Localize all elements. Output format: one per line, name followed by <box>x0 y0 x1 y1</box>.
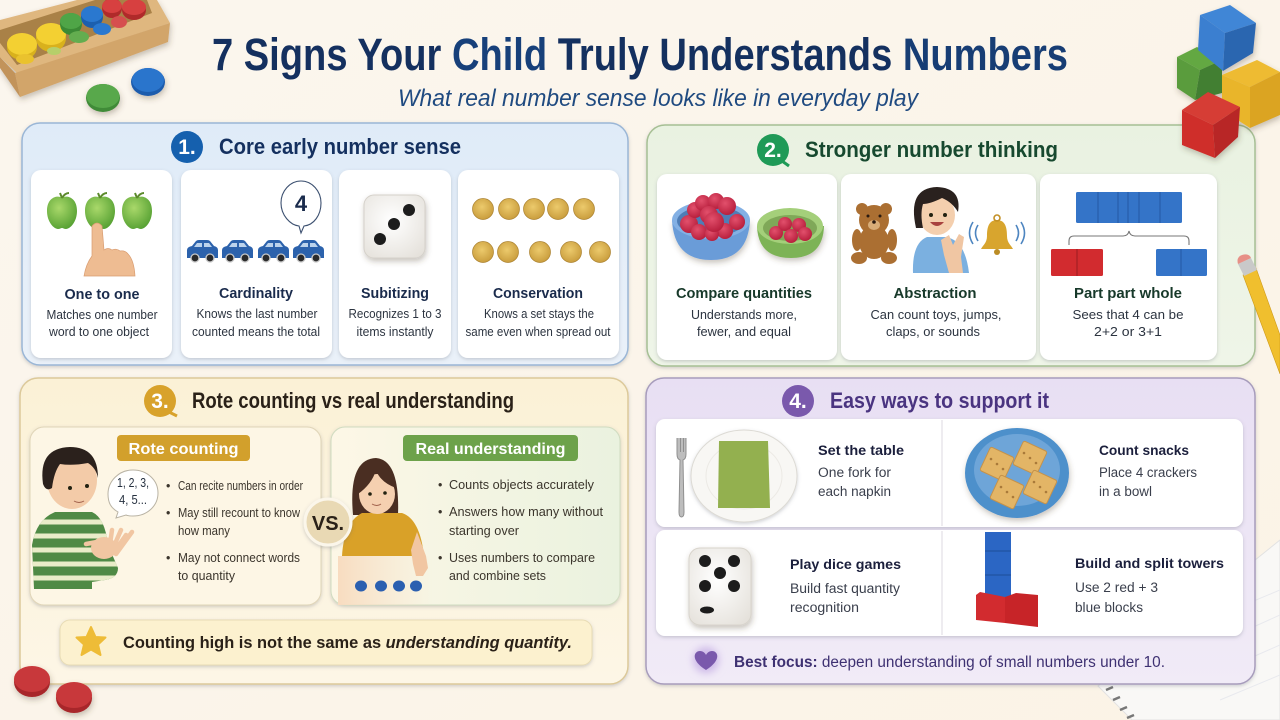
label: Cardinality <box>219 286 293 302</box>
icon: bell with sound waves <box>970 215 1024 255</box>
bullet list: rote counting: how many <box>178 524 231 538</box>
label: One to one <box>64 287 140 303</box>
description <box>870 307 1002 339</box>
bullet list: real understanding: Counts objects accurately <box>449 478 595 492</box>
activity description: blue blocks <box>1075 600 1143 615</box>
card: subitizing <box>339 170 451 358</box>
activity: build and split towers <box>976 532 1224 627</box>
title: 7 Signs Your Child Truly Understands Numbers <box>212 29 1068 80</box>
description: Knows a set stays the <box>484 306 594 321</box>
description <box>348 306 442 339</box>
description: counted means the total <box>192 324 320 339</box>
bullet list: real understanding: • <box>438 505 442 519</box>
wooden blocks stack <box>1177 5 1280 158</box>
pill: real understanding: Real understanding <box>416 441 566 458</box>
description: same even when spread out <box>466 324 611 339</box>
activity: set the table <box>677 430 904 522</box>
activity description: Build fast quantity <box>790 581 900 596</box>
label: Conservation <box>493 286 583 302</box>
description <box>46 307 158 339</box>
description: fewer, and equal <box>697 324 791 339</box>
activity description <box>1075 580 1158 615</box>
activity: play dice games <box>689 548 901 625</box>
pill: rote counting <box>117 435 250 461</box>
description: Knows the last number <box>196 306 318 321</box>
pill: real understanding <box>403 435 578 461</box>
bullet list: real understanding: starting over <box>449 524 519 538</box>
panel: rote counting vs real understanding <box>20 378 628 684</box>
card: one to one <box>31 170 172 358</box>
panel: stronger number thinking <box>647 125 1255 366</box>
bullet list: rote counting: May not connect words <box>178 551 300 565</box>
pencil <box>1238 254 1280 374</box>
description: 2+2 or 3+1 <box>1094 324 1162 339</box>
speech bubble: counting: 1, 2, 3, <box>117 476 149 490</box>
heading 3: Rote counting vs real understanding <box>192 388 514 413</box>
badge: vs: VS. <box>312 513 344 535</box>
red counter two <box>56 682 92 713</box>
activity label: Play dice games <box>790 556 901 572</box>
bullet list: rote counting: Can recite numbers in order <box>178 479 303 493</box>
bullet list: real understanding: Answers how many without <box>449 505 604 519</box>
illustration: boy counting on fingers <box>30 447 132 589</box>
bullet list: rote counting <box>166 479 303 583</box>
subtitle: What real number sense looks like in everyday play <box>398 85 920 112</box>
activity description <box>1099 465 1197 499</box>
badge: vs <box>305 499 351 545</box>
card: cardinality <box>181 170 332 358</box>
description: Understands more, <box>691 307 797 322</box>
callout text: Counting high is not the same as understanding quantity. <box>123 633 572 652</box>
description: Sees that 4 can be <box>1072 307 1184 322</box>
loose green counter <box>86 84 120 112</box>
heading 4: Easy ways to support it <box>830 388 1050 413</box>
bullet list: real understanding: • <box>438 551 442 565</box>
sub-panel: real understanding <box>331 427 620 605</box>
heading 1: Core early number sense <box>219 134 461 159</box>
icon: star <box>76 627 106 655</box>
icon: heart <box>693 647 719 673</box>
description: items instantly <box>356 324 434 339</box>
wooden tray with counters <box>0 0 170 97</box>
notebook <box>1098 540 1280 720</box>
heading 2: Stronger number thinking <box>805 137 1058 162</box>
icon: apples and pointing finger <box>47 193 152 276</box>
illustration: girl counting counters on table <box>338 458 432 605</box>
activity description: in a bowl <box>1099 484 1152 499</box>
badge 2 <box>757 134 789 166</box>
speech bubble: counting <box>108 470 158 518</box>
label: Abstraction <box>894 286 976 302</box>
badge 1: 1. <box>178 136 196 159</box>
description <box>192 306 320 339</box>
badge 4 <box>782 385 814 417</box>
icon: block tower <box>976 532 1038 627</box>
badge 4: 4. <box>789 390 807 413</box>
bullet list: rote counting: • <box>166 551 170 565</box>
best focus note: Best focus: deepen understanding of small numbers under 10. <box>734 654 1165 671</box>
description <box>691 307 797 339</box>
badge 1 <box>171 131 203 163</box>
bullet list: real understanding: Uses numbers to compare <box>449 551 595 565</box>
bullet list: rote counting: May still recount to know <box>178 506 301 520</box>
activity label: Count snacks <box>1099 442 1189 458</box>
pill: rote counting: Rote counting <box>128 441 238 458</box>
speech bubble: counting: 4, 5... <box>119 493 147 507</box>
badge 3: 3. <box>151 390 169 413</box>
card: abstraction <box>841 174 1036 360</box>
icon: teddy bear <box>851 203 897 264</box>
icon: clapping child <box>913 187 969 273</box>
card: compare quantities <box>657 174 837 360</box>
badge 3 <box>144 385 177 417</box>
bullet list: real understanding: and combine sets <box>449 569 546 583</box>
activity description: One fork for <box>818 465 892 480</box>
bullet list: real understanding <box>438 478 604 583</box>
loose blue counter <box>131 68 165 96</box>
icon: four cars with speech bubble: 4 <box>295 191 308 216</box>
red counter one <box>14 666 50 697</box>
label: Part part whole <box>1074 286 1182 302</box>
label: Subitizing <box>361 286 429 302</box>
activity description: Place 4 crackers <box>1099 465 1197 480</box>
description <box>466 306 611 339</box>
bullet list: real understanding: • <box>438 478 442 492</box>
activity description: Use 2 red + 3 <box>1075 580 1158 595</box>
icon: bowl of crackers <box>965 428 1069 518</box>
description <box>1072 307 1184 339</box>
icon: two rows of coins <box>472 198 610 262</box>
bullet list: rote counting: to quantity <box>178 569 236 583</box>
card: part part whole <box>1040 174 1217 360</box>
activity description: recognition <box>790 600 859 615</box>
bullet list: rote counting: • <box>166 506 170 520</box>
activity description <box>818 465 892 499</box>
sub-panel: rote counting <box>30 427 321 605</box>
panel: easy ways to support it <box>646 378 1255 684</box>
badge 2: 2. <box>764 139 782 162</box>
activity: count snacks <box>965 428 1197 518</box>
icon: block bar split into parts <box>1051 192 1207 276</box>
activity cards background <box>656 419 1243 636</box>
activity description: each napkin <box>818 484 891 499</box>
description: Matches one number <box>46 307 158 322</box>
icon: four cars with speech bubble <box>187 181 324 262</box>
description: word to one object <box>48 324 149 339</box>
icon: bowls of raspberries <box>672 193 824 260</box>
icon: die showing five <box>689 548 751 625</box>
callout: key message <box>60 620 592 665</box>
description: Can count toys, jumps, <box>870 307 1002 322</box>
activity description <box>790 581 900 615</box>
icon: plate fork napkin <box>677 430 797 522</box>
panel: core early number sense <box>22 123 628 365</box>
bullet list: rote counting: • <box>166 479 170 493</box>
description: Recognizes 1 to 3 <box>348 306 442 321</box>
card: conservation <box>458 170 619 358</box>
label: Compare quantities <box>676 286 812 302</box>
activity label: Set the table <box>818 442 904 458</box>
icon: die showing three <box>364 195 425 258</box>
description: claps, or sounds <box>886 324 980 339</box>
activity label: Build and split towers <box>1075 555 1224 571</box>
